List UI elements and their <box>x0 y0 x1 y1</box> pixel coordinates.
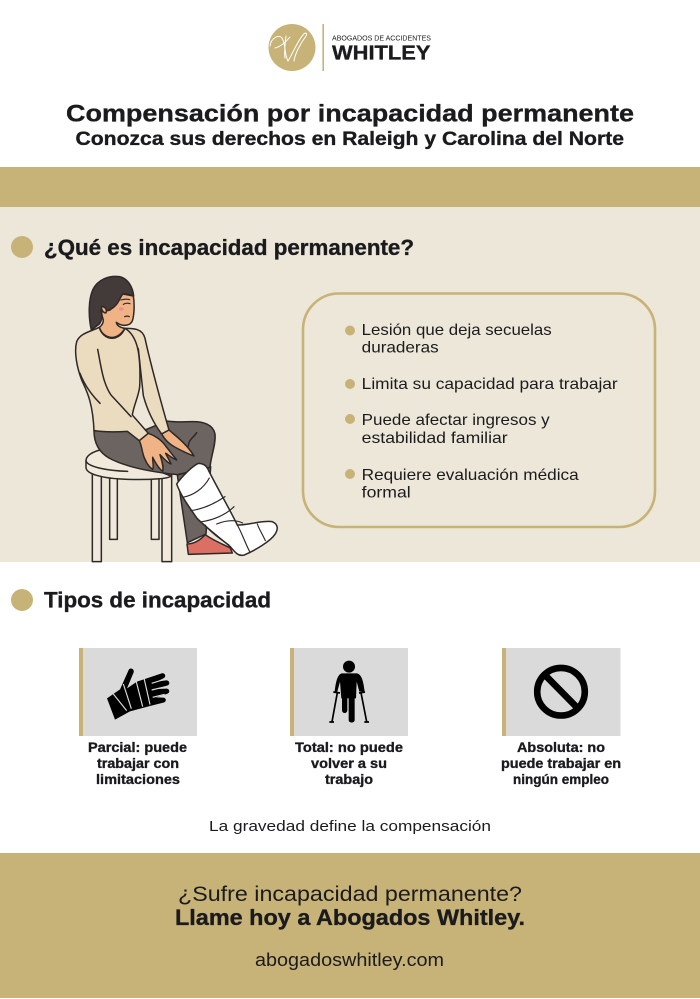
logo name: WHITLEY <box>332 42 431 64</box>
sweater body and near arm <box>76 327 148 441</box>
subtitle: Conozca sus derechos en Raleigh y Carolina del Norte <box>76 128 624 150</box>
label <box>88 739 187 787</box>
stool <box>86 449 172 562</box>
cta question: ¿Sufre incapacidad permanente? <box>178 883 522 906</box>
leg cast <box>177 463 277 555</box>
label: trabajo <box>325 771 373 787</box>
logo <box>268 24 431 71</box>
website: abogadoswhitley.com <box>255 950 444 970</box>
panel: qué es incapacidad permanente <box>0 207 700 562</box>
bullet 1: Lesión que deja secuelas <box>362 322 552 339</box>
heading marker <box>11 589 33 611</box>
panel: tipos de incapacidad <box>11 588 621 835</box>
ear <box>101 307 106 313</box>
label: Absoluta: no <box>517 739 605 755</box>
label: ningún empleo <box>513 771 609 787</box>
logo small text: ABOGADOS DE ACCIDENTES <box>332 34 431 42</box>
note: La gravedad define la compensación <box>209 818 491 835</box>
gold band <box>0 167 700 207</box>
heading marker <box>11 236 33 258</box>
heading: ¿Qué es incapacidad permanente? <box>44 235 414 260</box>
label <box>501 739 621 787</box>
bullet 3: estabilidad familiar <box>362 430 508 447</box>
hair <box>89 276 134 330</box>
bullet 1: duraderas <box>362 340 439 357</box>
title: Compensación por incapacidad permanente <box>66 100 634 128</box>
bullet 1 <box>345 322 552 357</box>
near hand <box>139 433 177 471</box>
shoe <box>187 535 232 554</box>
label: Parcial: puede <box>88 739 187 755</box>
far hand <box>162 430 194 456</box>
trousers <box>94 421 215 475</box>
label: volver a su <box>311 755 387 771</box>
call to action band <box>0 853 700 998</box>
heading: Tipos de incapacidad <box>44 588 271 612</box>
neck and face <box>99 293 134 338</box>
bullet 4 <box>345 467 579 502</box>
bullet 4: formal <box>362 485 411 502</box>
back leg <box>177 467 211 543</box>
icon: prohibition sign <box>537 668 585 716</box>
bullet 3 <box>345 412 550 447</box>
icon: person on crutches <box>329 661 369 722</box>
label <box>295 739 403 787</box>
cta action: Llame hoy a Abogados Whitley. <box>175 905 525 930</box>
icon: bandaged hand <box>107 669 169 720</box>
panel: bullet list <box>303 294 655 527</box>
far arm <box>125 328 169 434</box>
bullet 4: Requiere evaluación médica <box>362 467 579 484</box>
label: puede trabajar en <box>501 755 621 771</box>
face details <box>121 299 130 317</box>
label: trabajar con <box>97 755 179 771</box>
card: total <box>290 648 408 787</box>
bullet 3: Puede afectar ingresos y <box>362 412 550 429</box>
label: limitaciones <box>96 771 180 787</box>
label: Total: no puede <box>295 739 403 755</box>
bullet 2: Limita su capacidad para trabajar <box>362 376 618 393</box>
card: absoluta <box>501 648 621 787</box>
logo emblem <box>268 24 316 71</box>
illustration: seated woman with leg cast <box>76 276 277 562</box>
card: parcial <box>79 648 197 787</box>
